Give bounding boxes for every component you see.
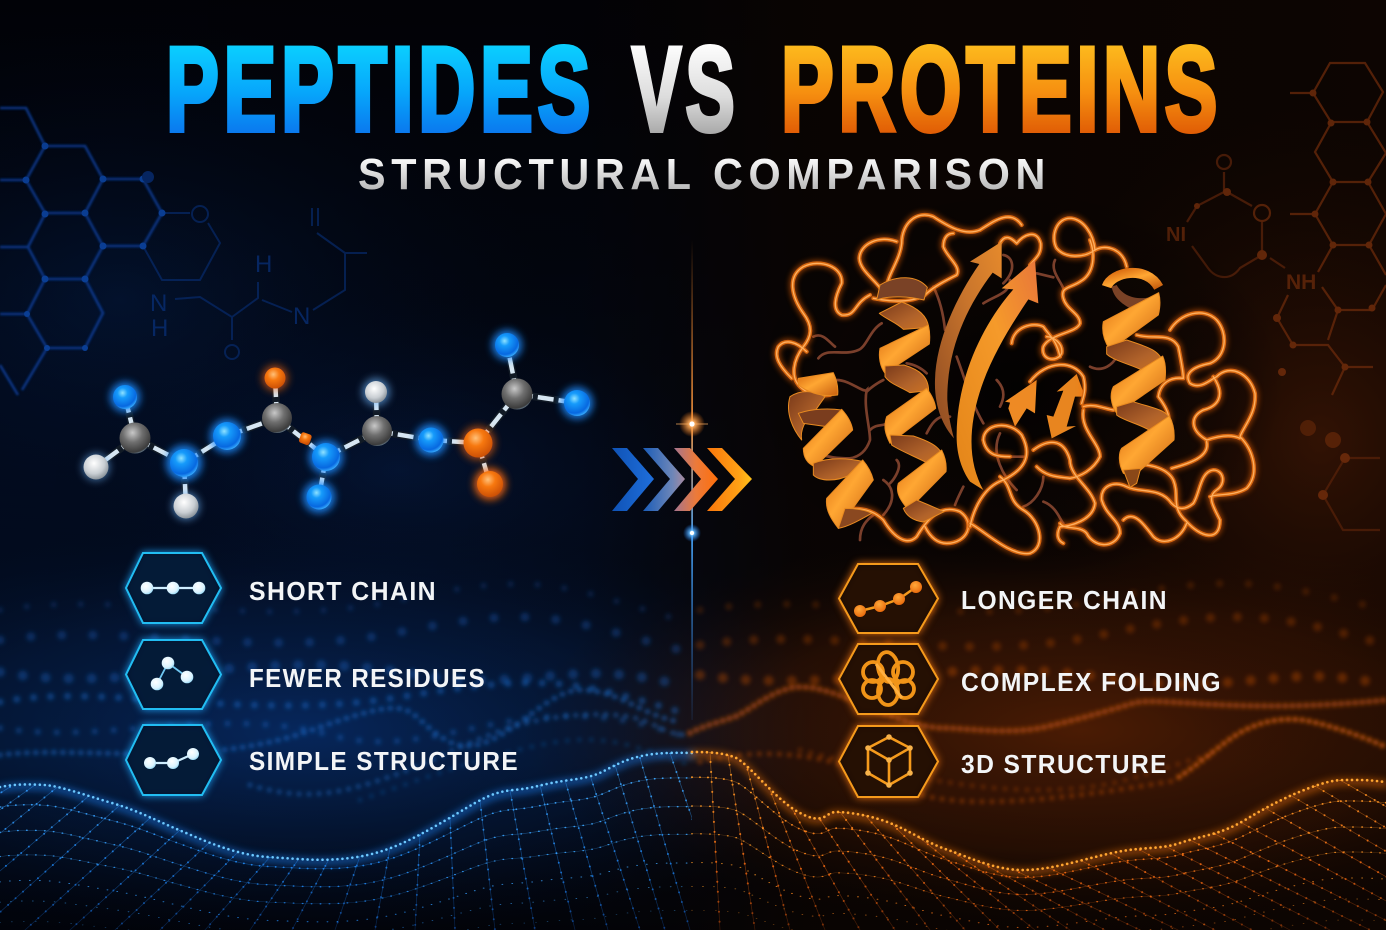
wave mesh: orange — [692, 752, 1386, 930]
hexagon frame — [839, 564, 938, 633]
bokeh particle field: orange — [690, 583, 1386, 802]
background molecular lattice: blue: N — [150, 290, 167, 317]
protein feature: complex folding — [839, 644, 1222, 714]
icon: bent three-node chain — [144, 748, 199, 769]
title word: VS: VS — [632, 22, 739, 156]
icon: four-node chain — [854, 581, 922, 617]
peptide molecule — [82, 330, 593, 520]
transition chevrons — [612, 448, 752, 511]
peptide feature: fewer residues — [126, 640, 486, 709]
flare: blue — [683, 524, 701, 542]
atom glows — [82, 330, 593, 520]
icon: straight three-node chain — [141, 582, 205, 594]
protein loop glow — [777, 215, 1255, 545]
protein front loop glow — [970, 365, 1085, 554]
background molecular lattice: blue: H — [255, 251, 272, 278]
label: SHORT CHAIN — [249, 576, 437, 606]
label: SIMPLE STRUCTURE — [249, 746, 519, 776]
icon: folded knot — [863, 650, 914, 705]
peptide feature: short chain — [126, 553, 437, 623]
hexagon frame — [126, 553, 221, 623]
title — [166, 22, 1222, 156]
icon: wireframe cube — [865, 734, 913, 788]
beta strand arrow: back — [935, 242, 1002, 438]
protein loops — [777, 215, 1255, 545]
atoms — [84, 333, 590, 518]
label: LONGER CHAIN — [961, 585, 1168, 615]
background molecular lattice: orange: NI — [1166, 224, 1186, 246]
protein front loop highlights — [970, 365, 1085, 554]
background molecular lattice: orange — [1166, 63, 1386, 530]
flare: orange — [676, 411, 708, 437]
protein feature: 3D structure — [839, 726, 1168, 797]
wave mesh: blue — [0, 753, 730, 930]
hexagon frame — [126, 725, 221, 795]
protein feature: longer chain — [839, 564, 1168, 633]
hexagon frame — [839, 644, 938, 714]
label: FEWER RESIDUES — [249, 663, 486, 693]
beta strand arrow: small right — [1047, 374, 1085, 438]
hexagon frame — [839, 726, 938, 797]
protein structure — [750, 190, 1283, 583]
icon: three residues — [151, 657, 193, 690]
beta strand arrow: small left — [1005, 380, 1037, 427]
title word: PEPTIDES: PEPTIDES — [166, 22, 595, 156]
bokeh particle field: blue — [0, 584, 690, 800]
hexagon frame — [126, 640, 221, 709]
peptide feature: simple structure — [126, 725, 519, 795]
molecule bonds — [96, 345, 577, 506]
protein helix: centre — [877, 278, 946, 522]
subtitle: STRUCTURAL COMPARISON — [358, 150, 1051, 199]
background molecular lattice: blue — [0, 108, 367, 395]
protein loop highlights — [777, 215, 1255, 545]
label: COMPLEX FOLDING — [961, 667, 1222, 697]
protein back chain — [813, 255, 1117, 540]
protein helix: left — [788, 373, 873, 528]
protein front loops — [970, 365, 1085, 554]
background molecular lattice: blue: N — [293, 303, 310, 330]
center divider line with flares — [676, 240, 708, 720]
background molecular lattice: orange: NH — [1286, 271, 1316, 294]
protein helix: right — [1103, 273, 1174, 487]
beta strand arrow: front — [957, 260, 1038, 490]
label: 3D STRUCTURE — [961, 749, 1168, 779]
background molecular lattice: blue: H — [151, 315, 168, 342]
